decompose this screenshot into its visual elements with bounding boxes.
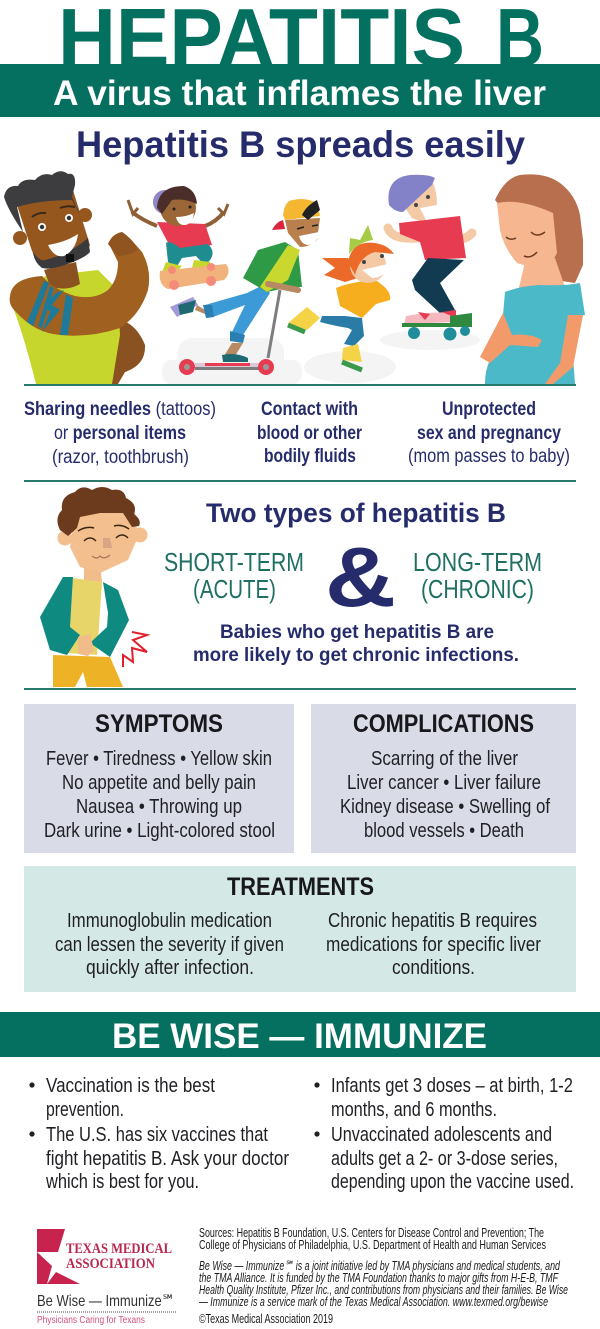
panel: complications: Scarring of the liver: [371, 748, 518, 770]
caption: unprotected sex: (mom passes to baby): [408, 446, 570, 467]
illustration: boy on scooter: [162, 199, 320, 384]
long-term chronic: (CHRONIC): [421, 574, 534, 604]
panel: treatments: can lessen the severity if given: [55, 934, 284, 956]
prevention bullets right: months, and 6 months.: [331, 1099, 497, 1121]
panel: complications: blood vessels • Death: [364, 820, 524, 842]
ampersand: &: [325, 530, 396, 624]
panel: complications: Liver cancer • Liver failure: [347, 772, 541, 794]
prevention bullets left: Vaccination is the best: [46, 1075, 215, 1097]
band: be wise immunize: BE WISE — IMMUNIZE: [112, 1017, 487, 1056]
babies note: [193, 622, 519, 666]
prevention bullets left: which is best for you.: [45, 1171, 199, 1193]
divider lines: [24, 384, 576, 690]
panel: symptoms: Dark urine • Light-colored stool: [44, 820, 275, 842]
illustration: man with tattoo: [4, 171, 149, 384]
prevention bullets left: The U.S. has six vaccines that: [46, 1124, 268, 1146]
prevention bullets left: fight hepatitis B. Ask your doctor: [46, 1148, 289, 1170]
short-term acute: (ACUTE): [193, 574, 276, 604]
initiative note: [198, 1258, 568, 1309]
band: be wise immunize: [0, 1012, 600, 1057]
prevention bullets left: prevention.: [46, 1099, 124, 1121]
illustration: boy with belly pain: [40, 487, 148, 687]
panel: symptoms: [24, 704, 294, 853]
panel: treatments: TREATMENTS: [227, 873, 374, 901]
logo: texas medical association: ASSOCIATION: [66, 1256, 155, 1272]
panel: treatments: medications for specific liver: [326, 934, 541, 956]
panel: complications: [311, 704, 576, 853]
caption: unprotected sex: [408, 399, 570, 467]
babies note: Babies who get hepatitis B are: [220, 622, 494, 643]
caption: sharing needles: [24, 399, 216, 468]
long-term chronic: [413, 547, 542, 604]
caption: sharing needles: (razor, toothbrush): [52, 447, 189, 468]
sources: [199, 1225, 546, 1252]
panel: complications: COMPLICATIONS: [353, 710, 534, 738]
subtitle band: [0, 64, 600, 117]
long-term chronic: LONG-TERM: [413, 547, 542, 577]
heading: spreads easily: Hepatitis B spreads easily: [76, 124, 525, 165]
caption: contact with blood: blood or other: [257, 423, 362, 444]
babies note: more likely to get chronic infections.: [193, 645, 519, 666]
logo: texas medical association: Be Wise — Immunize℠: [37, 1293, 175, 1310]
caption: unprotected sex: Unprotected: [442, 399, 536, 420]
caption: contact with blood: [257, 399, 362, 467]
caption: sharing needles: or personal items: [54, 423, 186, 444]
illustration: boy on skateboard with helmet: [380, 175, 480, 350]
illustration: pregnant woman: [480, 174, 585, 384]
illustration: girl on rollerblades: [288, 225, 396, 383]
illustration: child on skateboard: [128, 186, 229, 290]
caption: sharing needles: Sharing needles (tattoos): [24, 399, 216, 420]
short-term acute: SHORT-TERM: [164, 547, 304, 577]
panel: symptoms: SYMPTOMS: [95, 710, 223, 738]
logo: texas medical association: Physicians Caring for Texans: [37, 1315, 145, 1326]
caption: unprotected sex: sex and pregnancy: [417, 423, 561, 444]
panel: treatments: [24, 866, 576, 992]
short-term acute: [164, 547, 304, 604]
panel: complications: Kidney disease • Swelling of: [340, 796, 550, 818]
prevention bullets right: Unvaccinated adolescents and: [331, 1124, 552, 1146]
panel: symptoms: No appetite and belly pain: [62, 772, 256, 794]
caption: contact with blood: bodily fluids: [264, 446, 356, 467]
panel: treatments: Chronic hepatitis B requires: [328, 910, 537, 932]
logo: texas medical association: TEXAS MEDICAL: [66, 1241, 172, 1257]
logo: texas medical association: [37, 1229, 176, 1326]
panel: treatments: conditions.: [392, 957, 475, 979]
panel: symptoms: Nausea • Throwing up: [76, 796, 242, 818]
copyright: ©Texas Medical Association 2019: [199, 1311, 333, 1326]
panel: treatments: Immunoglobulin medication: [67, 910, 272, 932]
prevention bullets left: [29, 1075, 289, 1193]
panel: symptoms: Fever • Tiredness • Yellow skin: [46, 748, 272, 770]
heading: two types: Two types of hepatitis B: [206, 498, 506, 528]
subtitle band: A virus that inflames the liver: [53, 74, 546, 113]
prevention bullets right: [314, 1075, 574, 1193]
caption: contact with blood: Contact with: [261, 399, 358, 420]
panel: treatments: quickly after infection.: [86, 957, 254, 979]
